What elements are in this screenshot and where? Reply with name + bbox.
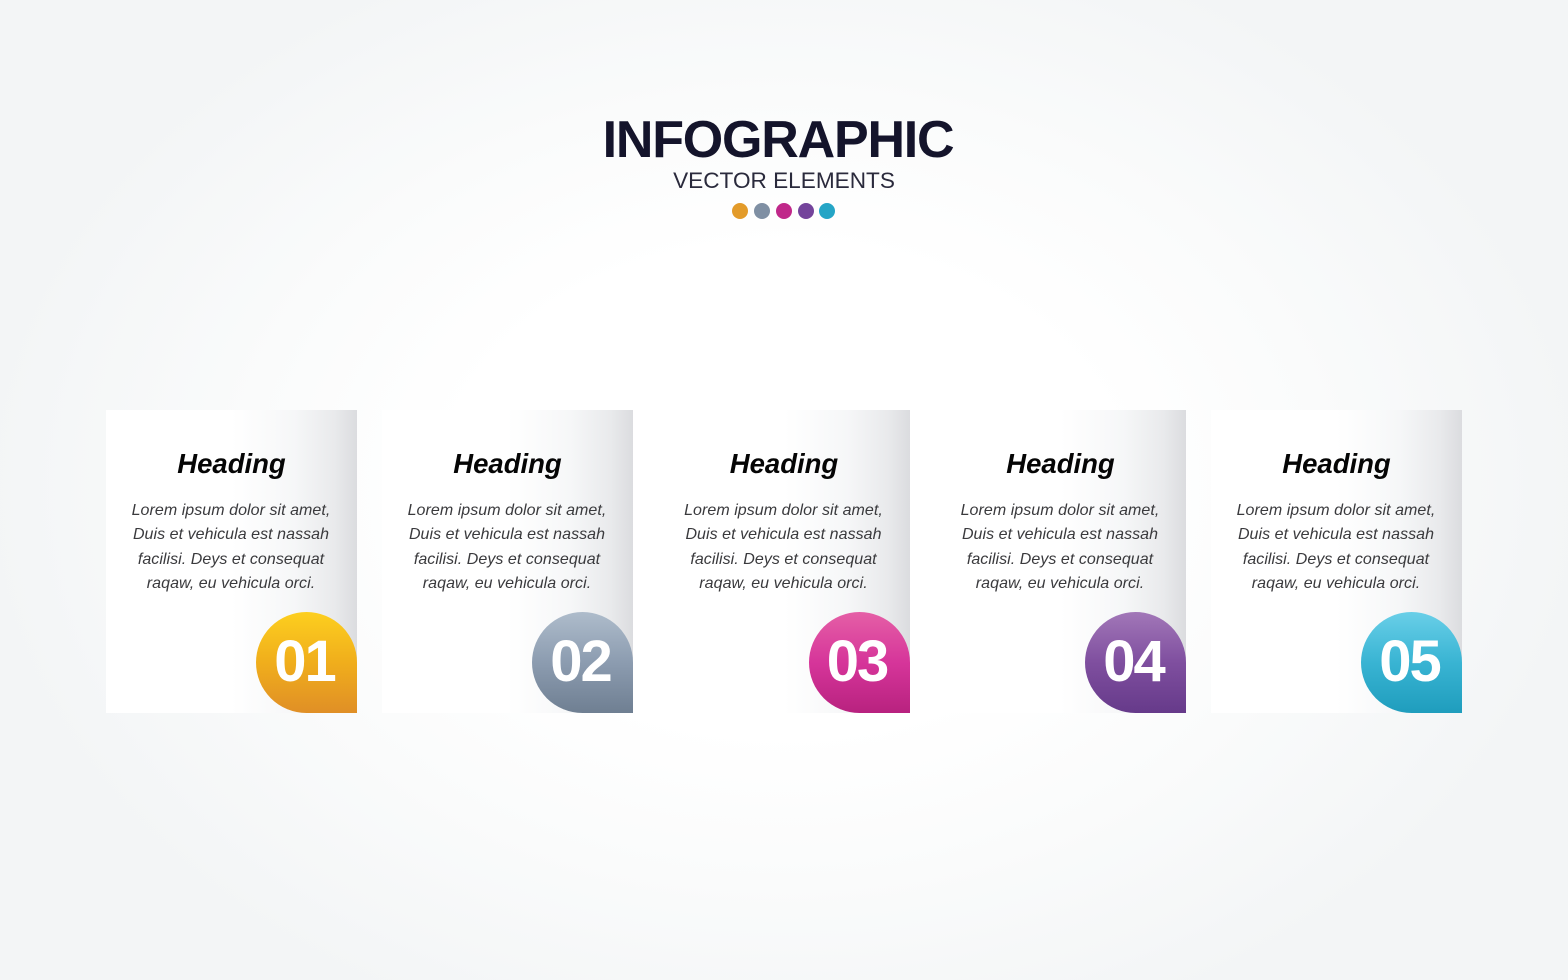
body text 05: raqaw, eu vehicula orci.	[1252, 575, 1420, 592]
heading 05: Heading	[1282, 448, 1391, 479]
body text 02: raqaw, eu vehicula orci.	[423, 575, 591, 592]
body text 05: Lorem ipsum dolor sit amet,	[1237, 502, 1435, 519]
heading 01: Heading	[177, 448, 286, 479]
body text 02: Duis et vehicula est nassah	[409, 526, 605, 543]
panel: card 01	[106, 410, 357, 713]
title: INFOGRAPHIC	[603, 111, 953, 169]
body text 04: Duis et vehicula est nassah	[962, 526, 1158, 543]
body text 03: facilisi. Deys et consequat	[690, 551, 877, 568]
body text 03: Lorem ipsum dolor sit amet,	[684, 502, 883, 519]
body text 01: Duis et vehicula est nassah	[133, 526, 329, 543]
heading 02: Heading	[453, 448, 562, 479]
body text 01: raqaw, eu vehicula orci.	[147, 575, 315, 592]
body text 02: facilisi. Deys et consequat	[414, 551, 600, 568]
body text 04: Lorem ipsum dolor sit amet,	[961, 502, 1159, 519]
number badge 02: 02	[550, 629, 611, 694]
panel: card 03	[658, 410, 910, 713]
panel: card 04	[935, 410, 1186, 713]
body text 05: facilisi. Deys et consequat	[1243, 551, 1429, 568]
heading 03: Heading	[730, 448, 838, 479]
body text 05: Duis et vehicula est nassah	[1238, 526, 1434, 543]
number badge 05: 05	[1379, 629, 1440, 694]
body text 01: Lorem ipsum dolor sit amet,	[132, 502, 330, 519]
body text 04: facilisi. Deys et consequat	[967, 551, 1153, 568]
subtitle: VECTOR ELEMENTS	[673, 168, 895, 193]
body text 01: facilisi. Deys et consequat	[138, 551, 324, 568]
body text 02	[408, 502, 606, 592]
panel: card 02	[382, 410, 633, 713]
body text 03	[684, 502, 883, 592]
body text 02: Lorem ipsum dolor sit amet,	[408, 502, 606, 519]
panel: card 05	[1211, 410, 1462, 713]
number badge 04	[1085, 612, 1186, 713]
heading 04: Heading	[1006, 448, 1115, 479]
number badge 02	[532, 612, 633, 713]
number badge 04: 04	[1103, 629, 1164, 694]
number badge 03: 03	[827, 629, 887, 694]
number badge 03	[808, 612, 910, 713]
number badge 01	[256, 612, 357, 713]
body text 03: raqaw, eu vehicula orci.	[699, 575, 868, 592]
colour dots	[732, 203, 835, 219]
body text 04: raqaw, eu vehicula orci.	[976, 575, 1144, 592]
body text 05	[1237, 502, 1435, 592]
body text 03: Duis et vehicula est nassah	[685, 526, 882, 543]
number badge 01: 01	[274, 629, 335, 694]
body text 01	[132, 502, 330, 592]
body text 04	[961, 502, 1159, 592]
number badge 05	[1361, 612, 1462, 713]
